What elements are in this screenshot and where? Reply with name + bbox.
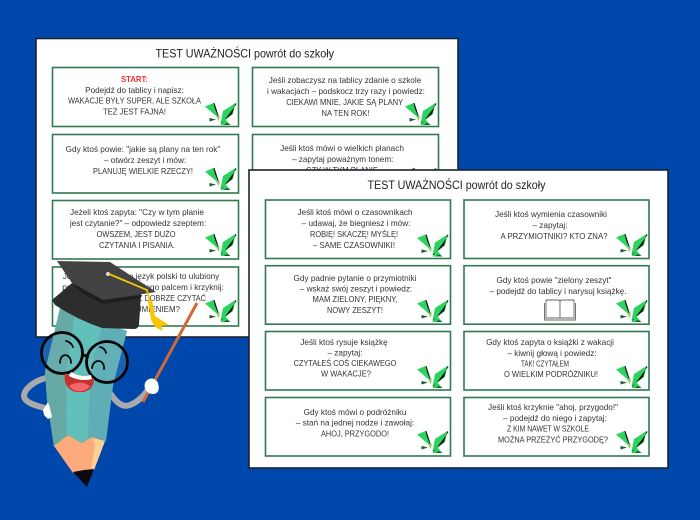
card: czasowniki: Jeśli ktoś mówi o czasownikach bbox=[297, 208, 413, 217]
card: wymienia czasowniki: A PRZYMIOTNIKI? KTO ZNA? bbox=[500, 231, 608, 241]
glasses bbox=[42, 332, 128, 382]
card: czasowniki: ROBIĘ! SKACZĘ! MYŚLĘ! bbox=[310, 228, 398, 239]
hand: left bbox=[43, 402, 52, 419]
card: książki z wakacji: O WIELKIM PODRÓŻNIKU! bbox=[504, 369, 598, 379]
card: rysuje książkę: Jeśli ktoś rysuje książkę bbox=[300, 338, 388, 347]
card: czasowniki bbox=[266, 200, 450, 258]
card: czytanie: Jeżeli ktoś zapyta: "Czy w tym planie bbox=[70, 208, 204, 217]
card: ahoj przygodo: Z KIM NAWET W SZKOLE bbox=[507, 424, 589, 434]
card: wymienia czasowniki: – zapytaj: bbox=[532, 221, 568, 230]
card: start: Podejdź do tablicy i napisz: bbox=[85, 86, 184, 95]
card: przymiotniki: – wskaż swój zeszyt i powiedz: bbox=[300, 284, 412, 294]
pointer stick bbox=[143, 303, 197, 402]
card: wymienia czasowniki bbox=[464, 200, 649, 258]
heading: front worksheet title: TEST UWAŻNOŚCI powrót do szkoły bbox=[368, 179, 546, 192]
card: start: START: bbox=[121, 75, 148, 84]
card: język polski: Jeśli ktoś powie, że język polski to ulubiony bbox=[63, 272, 220, 281]
card: przymiotniki: NOWY ZESZYT! bbox=[327, 305, 383, 315]
card: czasowniki: – udawaj, że biegniesz i mów: bbox=[302, 219, 410, 228]
card: plany: Gdy ktoś powie: "jakie są plany na ten rok" bbox=[66, 145, 220, 154]
card: przymiotniki bbox=[266, 266, 450, 324]
card: start bbox=[52, 68, 238, 126]
pencil body bbox=[45, 308, 127, 447]
card: język polski: przedmiot, wskaż na niego palcem i krzyknij: bbox=[62, 283, 224, 292]
card: zdanie na tablicy: i wakacjach – podskocz trzy razy i powiedz: bbox=[267, 87, 425, 96]
card: książki z wakacji: – kiwnij głową i powiedz: bbox=[507, 349, 597, 358]
card: przymiotniki: Gdy padnie pytanie o przymiotniki bbox=[294, 274, 417, 283]
card: zdanie na tablicy: NA TEN ROK! bbox=[322, 108, 370, 118]
arm: left bbox=[24, 378, 46, 408]
card: czytanie: OWSZEM, JEST DUŻO bbox=[96, 229, 176, 239]
card: rysuje książkę: – zapytaj: bbox=[327, 349, 363, 358]
card: książki z wakacji: TAK! CZYTAŁEM bbox=[521, 358, 569, 368]
panel: back worksheet bbox=[36, 38, 458, 337]
panel: front worksheet bbox=[249, 170, 668, 468]
pencil wood and tip bbox=[54, 435, 105, 487]
card: podróżnik bbox=[266, 398, 450, 456]
card: język polski: CZY UMIESZ DOBRZE CZYTAĆ bbox=[98, 293, 206, 303]
card: zielony zeszyt: Gdy ktoś powie "zielony zeszyt" bbox=[496, 276, 612, 285]
hand: right bbox=[145, 378, 159, 394]
card: wielkie plany: CZY W TYM PLANIE bbox=[306, 165, 378, 175]
card: czytanie: CZYTANIA I PISANIA. bbox=[99, 240, 175, 250]
graduation cap bbox=[52, 261, 156, 329]
card: ahoj przygodo bbox=[464, 398, 649, 456]
card: zdanie na tablicy: Jeśli zobaczysz na tablicy zdanie o szkole bbox=[269, 76, 422, 85]
card: start: TEŻ JEST FAJNA! bbox=[103, 106, 166, 116]
card: rysuje książkę bbox=[266, 332, 450, 390]
card: plany: – otwórz zeszyt i mów: bbox=[104, 156, 186, 165]
card: podróżnik: – stań na jednej nodze i zawołaj: bbox=[296, 418, 414, 428]
card: wielkie plany: – zapytaj poważnym tonem: bbox=[292, 155, 393, 164]
card: książki z wakacji bbox=[464, 332, 649, 390]
card: zielony zeszyt: – podejdź do tablicy i narysuj książkę. bbox=[490, 287, 626, 296]
card: język polski: ZE ZROZUMIENIEM? bbox=[102, 304, 180, 314]
card: przymiotniki: MAM ZIELONY, PIĘKNY, bbox=[312, 294, 398, 304]
card: plany bbox=[52, 134, 238, 193]
card: zielony zeszyt bbox=[464, 266, 649, 324]
card: wymienia czasowniki: Jeśli ktoś wymienia czasowniki bbox=[495, 210, 607, 219]
card: start: WAKACJE BYŁY SUPER, ALE SZKOŁA bbox=[68, 96, 201, 106]
icon: open book bbox=[544, 300, 576, 320]
card: plany: PLANUJĘ WIELKIE RZECZY! bbox=[93, 166, 193, 176]
card: czytanie: jest czytanie?" – odpowiedz szeptem: bbox=[69, 219, 206, 228]
card: język polski bbox=[52, 267, 238, 326]
card: rysuje książkę: CZYTAŁEŚ COŚ CIEKAWEGO bbox=[294, 357, 397, 368]
card: czytanie bbox=[52, 200, 238, 259]
card: wielkie plany: Jeśli ktoś mówi o wielkich planach bbox=[280, 144, 404, 153]
card: książki z wakacji: Gdy ktoś zapyta o książki z wakacji bbox=[486, 338, 614, 347]
card: ahoj przygodo: – podejdź do niego i zapytaj: bbox=[503, 414, 607, 423]
card: podróżnik: Gdy ktoś mówi o podróżniku bbox=[304, 408, 407, 417]
card: zdanie na tablicy: CIEKAWI MNIE, JAKIE SĄ PLANY bbox=[286, 97, 404, 107]
arm: right bbox=[110, 390, 148, 406]
eyes bbox=[60, 341, 106, 369]
card: podróżnik: AHOJ, PRZYGODO! bbox=[321, 429, 389, 439]
tassel bbox=[109, 274, 169, 331]
card: ahoj przygodo: MOŻNA PRZEŻYĆ PRZYGODĘ? bbox=[498, 434, 608, 444]
illustration: pencil teacher character bbox=[24, 261, 197, 487]
card: rysuje książkę: W WAKACJE? bbox=[321, 368, 371, 378]
card: wielkie plany bbox=[252, 134, 438, 193]
card: ahoj przygodo: Jeśli ktoś krzyknie "ahoj, przygodo!" bbox=[488, 403, 618, 412]
mouth bbox=[65, 372, 94, 392]
heading: back worksheet title: TEST UWAŻNOŚCI powrót do szkoły bbox=[156, 48, 334, 60]
card: zdanie na tablicy bbox=[252, 68, 438, 126]
card: czasowniki: – SAME CZASOWNIKI! bbox=[313, 240, 395, 250]
